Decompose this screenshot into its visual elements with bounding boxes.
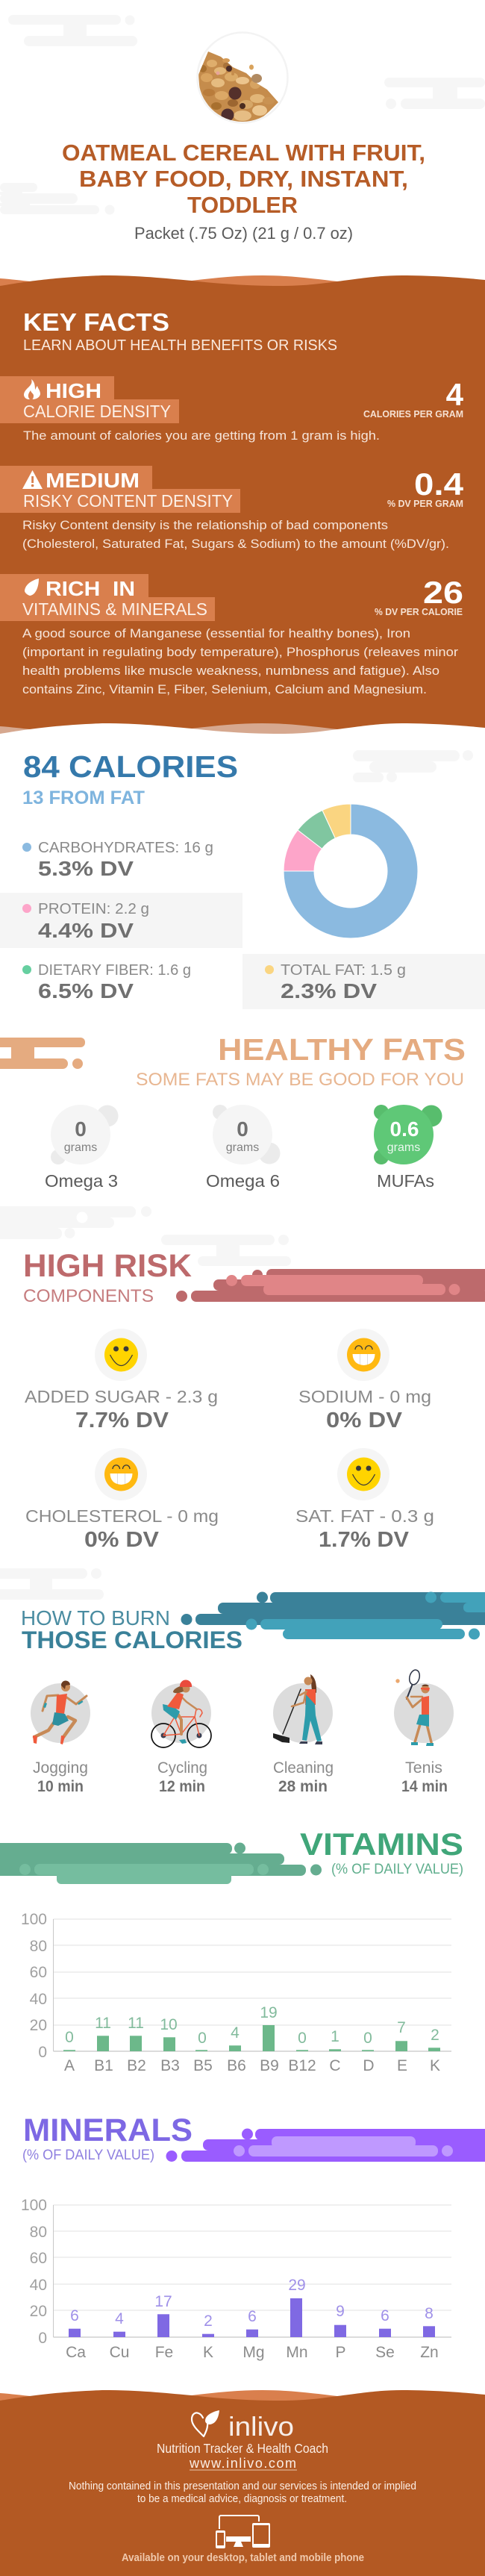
description: The amount of calories you are getting from 1 gram is high. — [23, 429, 380, 443]
label: rich in: RICH IN — [46, 577, 135, 600]
stat: MUFAs — [374, 1105, 442, 1191]
description: (important in regulating body temperature), Phosphorus (releaves minor — [22, 646, 459, 659]
bar chart: minerals: Fe — [155, 2344, 173, 2361]
stat: MUFAs: MUFAs — [377, 1171, 434, 1191]
subheading: key facts: LEARN ABOUT HEALTH BENEFITS OR RISKS — [23, 337, 337, 354]
stat: 4 calories per gram — [363, 377, 464, 420]
bar chart: minerals: Se — [375, 2344, 395, 2361]
bar chart: minerals: 0 — [38, 2330, 47, 2347]
food photo: granola in a circle — [194, 33, 288, 127]
description: (Cholesterol, Saturated Fat, Sugars & Sodium) to the amount (%DV/gr). — [22, 537, 449, 551]
legend: protein: PROTEIN: 2.2 g — [38, 901, 149, 917]
legend: protein: 4.4% DV — [38, 919, 134, 942]
legend: carbohydrates: CARBOHYDRATES: 16 g — [38, 840, 213, 856]
title — [62, 140, 425, 218]
legend: total fat — [242, 954, 485, 1009]
title: TODDLER — [187, 192, 298, 218]
bar chart: vitamins: 0 — [38, 2044, 47, 2061]
item: cholesterol — [25, 1448, 219, 1552]
bar chart: minerals: 80 — [30, 2224, 47, 2241]
stat: omega 6: Omega 6 — [206, 1171, 280, 1191]
heading: minerals: MINERALS — [23, 2112, 193, 2148]
description: A good source of Manganese (essential for healthy bones), Iron — [22, 627, 410, 640]
description — [22, 627, 459, 696]
subheading: percent of daily value: (% OF DAILY VALUE) — [331, 1862, 463, 1877]
bar chart: minerals: Mn — [286, 2344, 308, 2361]
bar chart: minerals: 20 — [30, 2303, 47, 2320]
bar chart: vitamins: D — [363, 2057, 375, 2074]
serving size: Packet (.75 Oz) (21 g / 0.7 oz) — [134, 224, 353, 243]
bar chart: minerals: 29 — [288, 2277, 306, 2294]
subheading: components: COMPONENTS — [23, 1286, 154, 1306]
bar chart: vitamins: 0 — [198, 2030, 207, 2047]
item: added sugar: 7.7% DV — [75, 1409, 169, 1432]
bar chart: minerals: Ca — [66, 2344, 86, 2361]
tagline: Nutrition Tracker & Health Coach — [157, 2441, 328, 2456]
stat: omega 3: Omega 3 — [45, 1171, 118, 1191]
stat: 0.4 % DV per gram: % DV PER GRAM — [387, 498, 463, 509]
bar chart: vitamins: 60 — [30, 1964, 47, 1981]
icon: smiling face — [337, 1448, 389, 1500]
legend: dietary fiber — [22, 962, 191, 1002]
icon: person sweeping — [273, 1674, 333, 1744]
subheading: SOME FATS MAY BE GOOD FOR YOU — [136, 1070, 464, 1090]
icon: warning — [22, 470, 43, 489]
disclaimer: Nothing contained in this presentation and our services is intended or implied — [69, 2480, 416, 2492]
description: Risky Content density is the relationship of bad components — [22, 519, 388, 532]
stat: MUFAs: 0.6 — [390, 1117, 419, 1141]
icon: grinning face — [337, 1329, 389, 1381]
item: cholesterol: CHOLESTEROL - 0 mg — [25, 1506, 219, 1526]
description: health problems like muscle weakness, numbness and fatigue). Also — [22, 664, 439, 678]
decorative shape: vitamins — [0, 1842, 322, 1884]
subheading: 13 from fat: 13 FROM FAT — [22, 788, 145, 808]
item: sodium — [298, 1329, 431, 1432]
bar chart: vitamins: E — [397, 2057, 407, 2074]
heading: healthy fats: HEALTHY FATS — [218, 1032, 466, 1067]
heading: high risk: HIGH RISK — [23, 1248, 192, 1284]
activity: tennis: 14 min — [401, 1778, 448, 1795]
bar chart: vitamins: B3 — [160, 2057, 180, 2074]
bar chart: vitamins — [21, 1911, 451, 2074]
activity: tennis — [394, 1669, 454, 1795]
icon: grinning face — [95, 1448, 147, 1500]
stat: omega 3 — [45, 1105, 118, 1191]
stat: 0.4 % DV per gram: 0.4 — [414, 467, 464, 502]
legend: carbohydrates — [22, 840, 213, 880]
bar chart: minerals: 4 — [115, 2310, 124, 2327]
bar chart: minerals: P — [335, 2344, 346, 2361]
legend: total fat: TOTAL FAT: 1.5 g — [281, 962, 406, 979]
legend: protein — [0, 893, 242, 948]
title: OATMEAL CEREAL WITH FRUIT, — [62, 140, 425, 166]
icon: tennis player — [394, 1669, 454, 1746]
icon: desktop, tablet and phone — [216, 2516, 270, 2548]
bar chart: vitamins: C — [329, 2057, 341, 2074]
stat: 4 calories per gram: CALORIES PER GRAM — [363, 408, 463, 420]
panel: key facts — [0, 275, 485, 746]
activity: jogging — [31, 1680, 90, 1795]
stat: omega 6: 0 — [237, 1117, 248, 1141]
panel: vitamins — [0, 1827, 463, 2074]
bar chart: vitamins: 4 — [231, 2024, 240, 2042]
bar chart: minerals: Mg — [242, 2344, 265, 2361]
bar chart: vitamins: B2 — [127, 2057, 146, 2074]
stat: 26 % DV per calorie: 26 — [423, 575, 463, 610]
risky content density block — [0, 466, 464, 551]
stat: 0.4 % DV per gram — [387, 467, 464, 509]
logo: inlivo — [192, 2410, 294, 2442]
item: added sugar: ADDED SUGAR - 2.3 g — [25, 1387, 218, 1406]
stat: MUFAs: grams — [387, 1141, 420, 1154]
description — [22, 519, 449, 551]
bar chart: minerals: 6 — [70, 2307, 79, 2324]
decorative shape: high risk — [176, 1269, 485, 1302]
icon: flame — [24, 379, 40, 399]
bar chart: minerals: 6 — [248, 2308, 257, 2325]
icon: cyclist — [0, 1680, 211, 1747]
bar chart: vitamins: B12 — [288, 2057, 316, 2074]
vitamins and minerals block — [0, 574, 463, 696]
description: contains Zinc, Vitamin E, Fiber, Selenium, Calcium and Magnesium. — [22, 683, 427, 696]
stat: 26 % DV per calorie: % DV PER CALORIE — [375, 606, 463, 617]
bar chart: vitamins: B5 — [193, 2057, 213, 2074]
bar chart: minerals: 9 — [336, 2303, 345, 2320]
title: BABY FOOD, DRY, INSTANT, — [79, 166, 408, 192]
stat: omega 3: grams — [64, 1141, 97, 1154]
activity: cycling — [0, 1680, 211, 1795]
bar chart: vitamins: 2 — [431, 2027, 439, 2044]
icon: leaf — [25, 578, 39, 596]
label: medium: MEDIUM — [46, 469, 140, 492]
bar chart: vitamins: 11 — [95, 2015, 111, 2032]
donut chart — [284, 804, 418, 938]
legend: dietary fiber: 6.5% DV — [38, 979, 134, 1002]
panel: high risk components — [23, 1248, 485, 1552]
label: risky content density: RISKY CONTENT DENSITY — [23, 491, 233, 511]
heading: key facts: KEY FACTS — [23, 308, 169, 336]
bar chart: minerals: K — [203, 2344, 213, 2361]
item: sodium: SODIUM - 0 mg — [298, 1387, 431, 1406]
bar chart: vitamins: 0 — [363, 2030, 372, 2047]
bar chart: vitamins: K — [430, 2057, 440, 2074]
item: sodium: 0% DV — [326, 1409, 403, 1432]
stat: omega 6: grams — [226, 1141, 259, 1154]
bar chart: vitamins: 10 — [160, 2016, 178, 2033]
activity: cleaning — [273, 1674, 334, 1795]
bar chart: vitamins: A — [64, 2057, 75, 2074]
item: saturated fat: SAT. FAT - 0.3 g — [295, 1506, 434, 1526]
bar chart: vitamins: 19 — [260, 2004, 278, 2021]
logo: inlivo: inlivo — [228, 2411, 294, 2442]
bar chart: vitamins: 1 — [331, 2028, 340, 2045]
item: saturated fat: 1.7% DV — [319, 1528, 410, 1552]
bar chart: minerals: Zn — [420, 2344, 439, 2361]
bar chart: minerals: 100 — [21, 2197, 47, 2214]
bar chart: vitamins: B6 — [227, 2057, 246, 2074]
bar chart: vitamins: 80 — [30, 1938, 47, 1955]
icon: smiling face — [95, 1329, 147, 1381]
label: high: HIGH — [46, 379, 101, 402]
bar chart: vitamins: 40 — [30, 1991, 47, 2008]
bar chart: vitamins: 0 — [298, 2030, 307, 2047]
heading: 84 calories: 84 CALORIES — [23, 749, 238, 784]
bar chart: minerals: 17 — [154, 2293, 172, 2310]
heading: vitamins: VITAMINS — [300, 1827, 463, 1862]
legend: dietary fiber: DIETARY FIBER: 1.6 g — [38, 962, 191, 979]
item: cholesterol: 0% DV — [84, 1528, 160, 1552]
bar chart: vitamins: 11 — [128, 2015, 144, 2032]
heading: how to burn: HOW TO BURN — [21, 1606, 170, 1630]
stat: omega 3: 0 — [75, 1117, 87, 1141]
activity: jogging: Jogging — [33, 1759, 88, 1777]
bar chart: minerals: 2 — [204, 2313, 213, 2330]
stat: omega 6 — [206, 1105, 281, 1191]
activity: cleaning: Cleaning — [273, 1759, 334, 1777]
bar chart: minerals: Cu — [110, 2344, 129, 2361]
bar chart: minerals: 6 — [381, 2307, 389, 2324]
bar chart: vitamins: B9 — [260, 2057, 279, 2074]
item: added sugar — [25, 1329, 218, 1432]
activity: cycling: Cycling — [157, 1759, 207, 1777]
label: vitamins and minerals: VITAMINS & MINERALS — [22, 599, 207, 619]
bar chart: minerals: 60 — [30, 2250, 47, 2267]
heading: those calories: THOSE CALORIES — [22, 1627, 242, 1653]
stat: 26 % DV per calorie — [375, 575, 463, 617]
bar chart: vitamins: 20 — [30, 2017, 47, 2034]
panel: healthy fats — [0, 1032, 466, 1191]
panel: minerals — [21, 2112, 485, 2361]
disclaimer — [69, 2480, 416, 2505]
activity: jogging: 10 min — [37, 1778, 84, 1795]
icon: jogger — [31, 1680, 90, 1744]
activity: tennis: Tenis — [405, 1759, 442, 1777]
subheading: percent of daily value: (% OF DAILY VALUE) — [22, 2148, 154, 2163]
panel: how to burn those calories — [0, 1591, 485, 1795]
availability note: Available on your desktop, tablet and mobile phone — [122, 2552, 364, 2564]
decorative shape: healthy fats — [0, 1038, 85, 1069]
legend: carbohydrates: 5.3% DV — [38, 857, 134, 880]
bar chart: minerals — [21, 2197, 451, 2361]
bar chart: vitamins: 0 — [65, 2029, 74, 2046]
legend: total fat: 2.3% DV — [281, 979, 377, 1002]
calorie density block — [0, 376, 464, 443]
decorative shape: minerals — [166, 2129, 485, 2162]
activity: cycling: 12 min — [159, 1778, 205, 1795]
bar chart: vitamins: 100 — [21, 1911, 47, 1928]
panel: footer — [0, 2390, 485, 2576]
bar chart: minerals: 8 — [425, 2305, 434, 2322]
bar chart: minerals: 40 — [30, 2277, 47, 2294]
disclaimer: to be a medical advice, diagnosis or treatment. — [137, 2493, 347, 2505]
decorative shape: burn — [181, 1591, 485, 1639]
panel: calories — [0, 749, 485, 1009]
bar chart: vitamins: 7 — [397, 2019, 406, 2036]
stat: 4 calories per gram: 4 — [446, 377, 464, 412]
activity: cleaning: 28 min — [278, 1778, 328, 1795]
label: calorie density: CALORIE DENSITY — [23, 402, 171, 421]
item: saturated fat — [295, 1448, 434, 1552]
bar chart: vitamins: B1 — [94, 2057, 113, 2074]
website: www.inlivo.com — [189, 2456, 296, 2471]
